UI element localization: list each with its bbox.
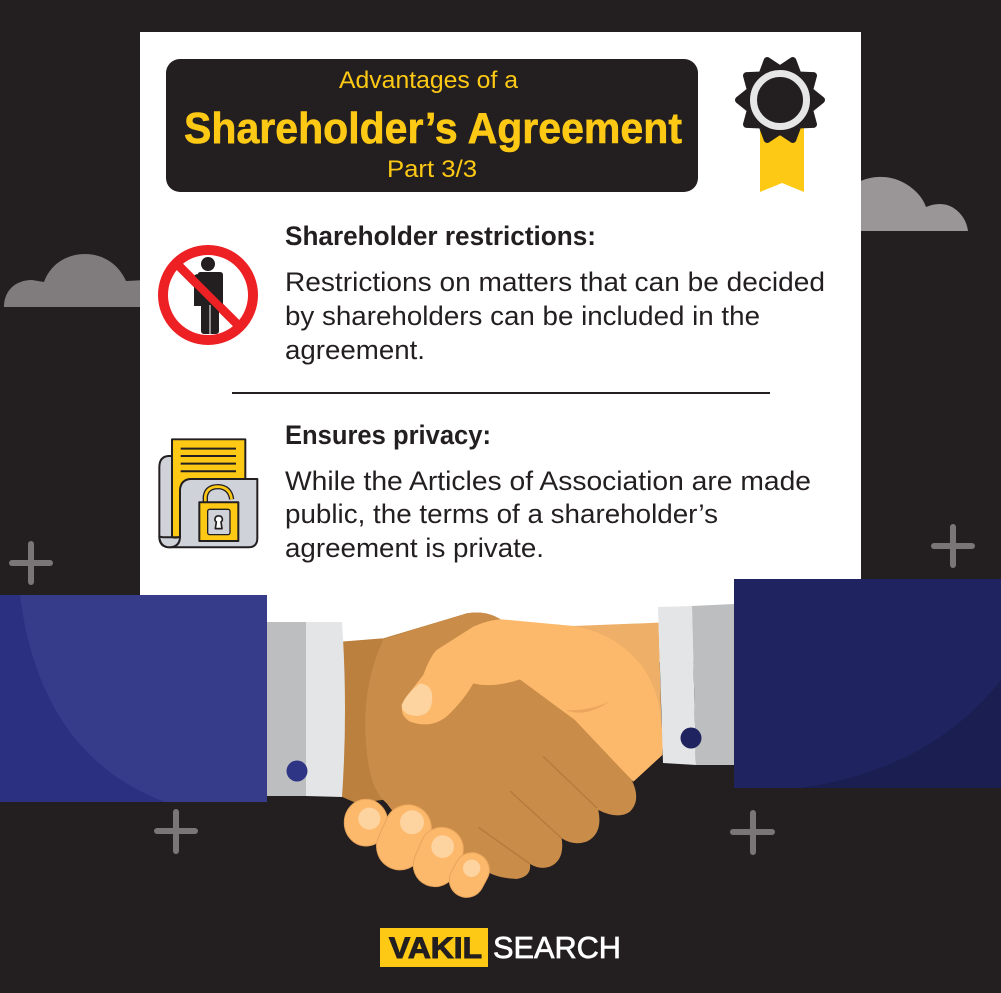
icon: award ribbon badge — [738, 60, 822, 192]
right sleeve — [734, 579, 1001, 788]
finger lines — [478, 757, 597, 864]
dark ground below the panel — [140, 662, 861, 800]
dark hand — [365, 612, 636, 879]
fingers — [344, 797, 495, 903]
light palm — [402, 619, 663, 782]
handshake — [340, 612, 663, 903]
light hand wrist — [500, 620, 662, 782]
text block: shareholder restrictions: agreement. — [285, 335, 425, 365]
cloud: right — [855, 177, 968, 231]
text block: ensures privacy: agreement is private. — [285, 533, 544, 563]
logo: Vakil Search: SEARCH — [493, 930, 621, 965]
dark hand wrist — [340, 612, 502, 803]
white content panel — [140, 32, 861, 662]
icon: document with open padlock — [159, 439, 257, 547]
plus sign: left lower — [154, 809, 198, 854]
title banner: Shareholder’s Agreement — [184, 104, 682, 153]
title banner: Advantages of a — [339, 67, 519, 94]
left sleeve — [0, 595, 267, 802]
plus sign: right upper — [931, 524, 975, 568]
title banner: Part 3/3 — [387, 156, 477, 183]
finger nails — [358, 808, 480, 877]
icon: no person sign — [163, 250, 253, 340]
text block: shareholder restrictions — [285, 221, 825, 365]
text block: ensures privacy: Ensures privacy: — [285, 420, 491, 450]
text block: shareholder restrictions: Restrictions on matters that can be decided — [285, 267, 825, 297]
text block: ensures privacy: While the Articles of Association are made — [285, 466, 811, 496]
title banner — [166, 59, 698, 192]
right shirt cuff — [658, 604, 734, 765]
plus sign: left upper — [9, 541, 53, 585]
text block: shareholder restrictions: Shareholder restrictions: — [285, 221, 596, 251]
logo: Vakil Search: VAKIL — [389, 932, 482, 965]
cloud: left — [4, 254, 145, 307]
palm crease — [565, 701, 611, 713]
text block: ensures privacy — [285, 420, 811, 563]
logo: Vakil Search — [380, 928, 621, 967]
text block: shareholder restrictions: by shareholders can be included in the — [285, 301, 760, 331]
text block: ensures privacy: public, the terms of a shareholder’s — [285, 499, 718, 529]
thumb nail — [402, 683, 432, 716]
left shirt cuff — [267, 622, 345, 797]
plus sign: right lower — [730, 810, 775, 855]
